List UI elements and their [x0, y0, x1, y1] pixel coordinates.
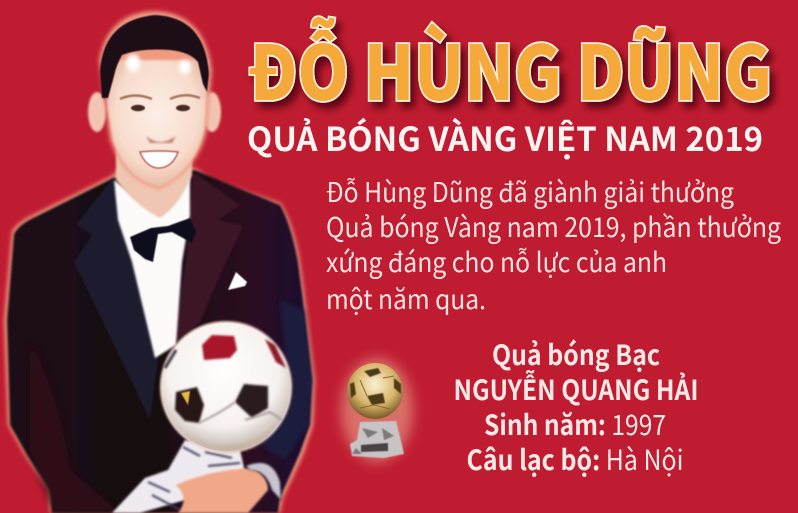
football trophy	[160, 321, 292, 453]
pocket square	[228, 272, 247, 290]
birth year: Sinh năm: 1997	[484, 404, 666, 444]
head halo	[99, 11, 212, 189]
winner name: NGUYỄN QUANG HẢI	[454, 369, 698, 409]
hair	[100, 15, 209, 98]
face	[106, 60, 208, 187]
photo: footballer holding trophy	[4, 11, 315, 513]
trophy stand stripes	[148, 447, 240, 510]
club: Câu lạc bộ: Hà Nội	[466, 439, 684, 479]
bow tie	[130, 218, 196, 262]
description text block	[326, 171, 781, 317]
forehead highlights	[126, 54, 191, 74]
subtitle: QUẢ BÓNG VÀNG VIỆT NAM 2019	[247, 113, 763, 161]
description text block: xứng đáng cho nỗ lực của anh	[326, 241, 667, 280]
nose	[146, 136, 176, 143]
watch	[246, 463, 281, 500]
eyes and brows	[120, 95, 200, 111]
neck	[116, 150, 192, 218]
jacket	[4, 168, 315, 513]
description text block: một năm qua.	[326, 278, 486, 317]
award name: Quả bóng Bạc	[492, 334, 660, 374]
ears	[88, 92, 221, 132]
trophy stand	[112, 440, 245, 513]
description text block: Đỗ Hùng Dũng đã giành giải thưởng	[326, 171, 734, 210]
smile	[140, 151, 178, 168]
silver ball winner details	[454, 334, 698, 479]
icon: silver ball trophy	[341, 358, 413, 462]
shirt	[114, 172, 190, 358]
hand	[176, 468, 268, 513]
